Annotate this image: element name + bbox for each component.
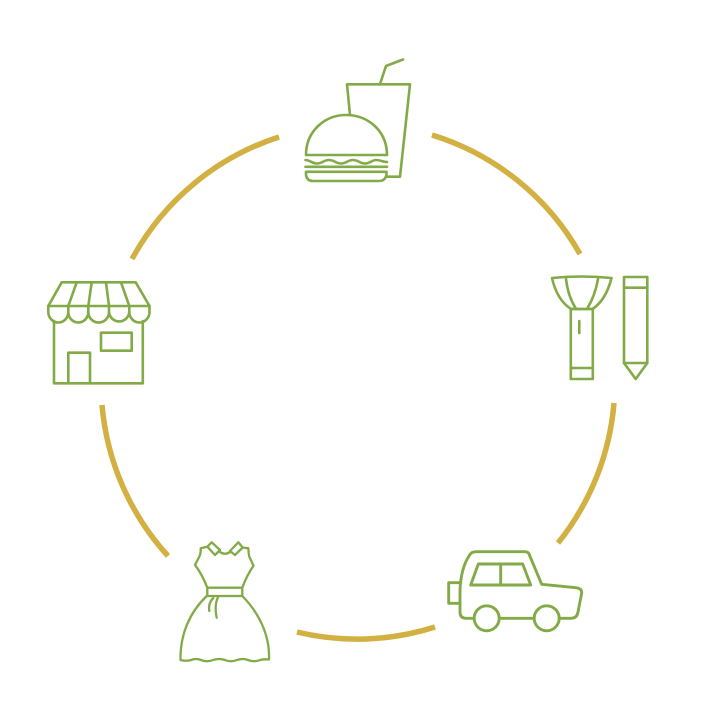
icon: car <box>449 552 582 631</box>
arc: bottom <box>297 627 435 639</box>
icon: burger and drink <box>306 60 410 181</box>
icon: storefront <box>48 282 149 383</box>
arc ring <box>102 135 614 639</box>
arc: bottom left <box>102 405 168 556</box>
arc: top right <box>432 135 580 254</box>
arc: right <box>558 403 614 543</box>
icon: flashlight and pencil <box>552 276 647 379</box>
icon: dress <box>180 542 269 661</box>
arc: top left <box>132 137 279 259</box>
